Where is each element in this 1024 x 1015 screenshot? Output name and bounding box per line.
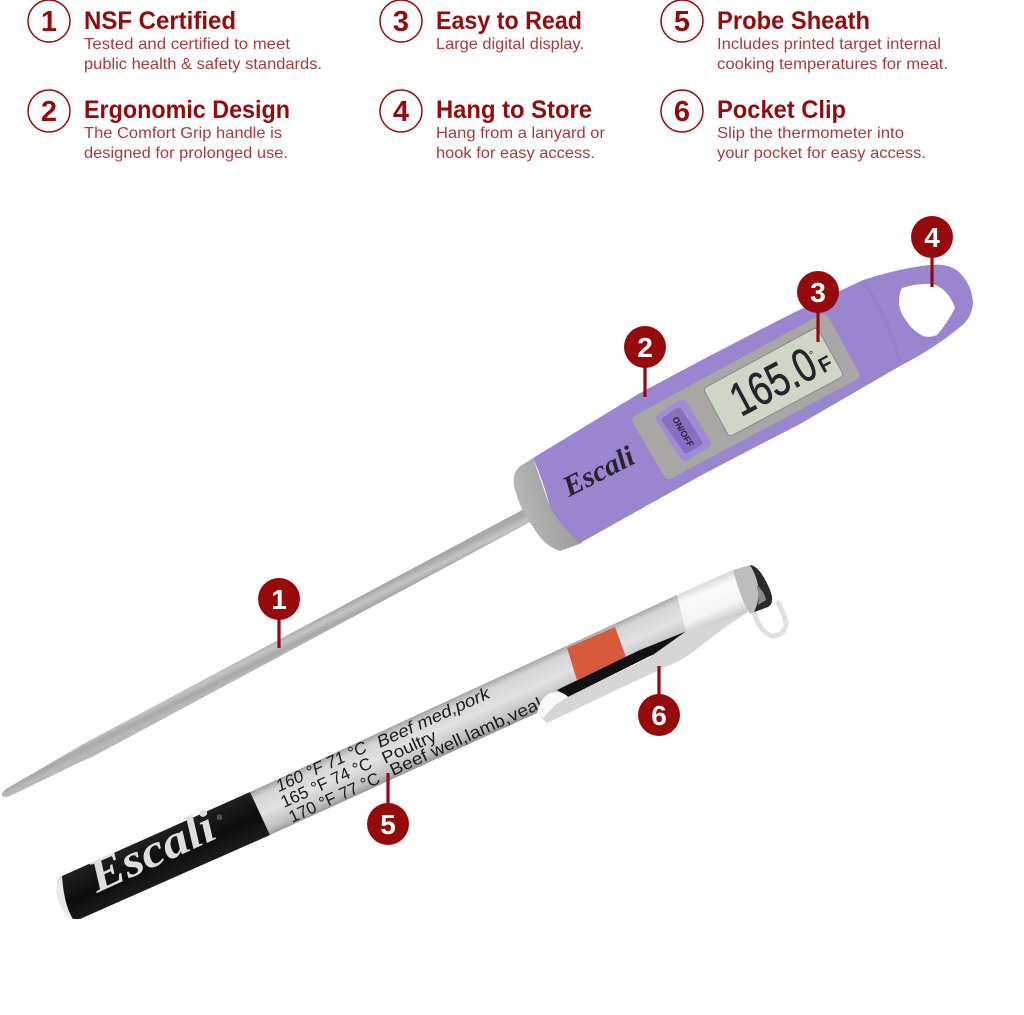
feature 5: Probe Sheath: Probe Sheath	[717, 7, 870, 35]
on/off label: ON/OFF	[670, 415, 696, 449]
feature 6: Pocket Clip: Pocket Clip	[717, 96, 846, 124]
callout 6: 6	[651, 700, 667, 731]
feature 4: Hang to Store	[380, 90, 606, 162]
temperature chart printed on sheath: 160 °F 71 °C	[273, 737, 370, 796]
LCD screen	[704, 328, 843, 436]
feature 2: Ergonomic Design: Ergonomic Design	[84, 96, 290, 124]
registered mark: ®	[217, 814, 223, 822]
feature 3: Easy to Read: Large digital display.	[436, 36, 584, 53]
sheath end highlight	[57, 876, 73, 919]
callout 1	[258, 578, 300, 648]
callout 2: 2	[637, 332, 653, 363]
feature 2: Ergonomic Design: designed for prolonged use.	[84, 145, 288, 162]
temperature chart printed on sheath	[273, 683, 545, 827]
cap opening	[750, 565, 772, 612]
temperature chart printed on sheath: Poultry	[379, 726, 440, 768]
feature 6: Pocket Clip: Slip the thermometer into	[717, 125, 904, 142]
feature 5: Probe Sheath: 5	[674, 6, 690, 38]
callout 4: 4	[924, 222, 940, 253]
feature 2: Ergonomic Design	[28, 90, 290, 162]
temperature chart printed on sheath: 170 °F 77 °C	[286, 769, 383, 827]
feature 5: Probe Sheath: Includes printed target internal	[717, 36, 941, 53]
sheath collar	[677, 570, 748, 633]
callout 5	[367, 773, 409, 845]
feature 6: Pocket Clip: 6	[674, 96, 690, 128]
callout 2	[624, 326, 666, 397]
faceplate	[632, 314, 860, 479]
LCD reading: 165.0	[721, 337, 825, 426]
clip tip highlight	[537, 692, 568, 718]
handle brand: Escali	[557, 440, 640, 504]
LCD reading: F	[815, 351, 837, 378]
purple handle with hanging loop	[533, 265, 973, 543]
orange target band	[567, 627, 626, 680]
feature 1: NSF Certified	[28, 0, 322, 73]
probe shaft	[2, 508, 532, 797]
callout 4	[911, 216, 953, 287]
feature 1: NSF Certified: NSF Certified	[84, 7, 236, 35]
pocket clip	[537, 612, 748, 723]
feature 1: NSF Certified: 1	[41, 6, 57, 38]
temperature chart printed on sheath: Beef well,lamb,veal	[387, 694, 545, 780]
sheath brand: Escali	[79, 800, 223, 903]
callout 3: 3	[810, 277, 826, 308]
dark clip gap	[557, 631, 687, 697]
end cap	[733, 565, 772, 614]
feature 5: Probe Sheath: cooking temperatures for meat.	[717, 56, 948, 73]
feature 6: Pocket Clip: your pocket for easy access.	[717, 145, 926, 162]
callout 5: 5	[380, 809, 396, 840]
grip crease	[863, 282, 900, 362]
callout 1: 1	[271, 584, 287, 615]
feature 1: NSF Certified: Tested and certified to meet	[84, 36, 291, 53]
feature 3: Easy to Read	[380, 0, 584, 53]
temperature chart printed on sheath: Beef med,pork	[374, 683, 494, 752]
feature 2: Ergonomic Design: The Comfort Grip handle is	[84, 125, 282, 142]
feature 6: Pocket Clip	[661, 90, 926, 162]
feature 3: Easy to Read: 3	[393, 6, 409, 38]
feature 4: Hang to Store: Hang to Store	[436, 96, 592, 124]
hanging ring	[754, 601, 786, 636]
handle collar	[514, 458, 582, 551]
on/off button inset	[662, 408, 702, 453]
thermometer illustration	[2, 265, 973, 797]
feature 4: Hang to Store: Hang from a lanyard or	[436, 125, 606, 142]
feature 4: Hang to Store: hook for easy access.	[436, 145, 595, 162]
feature 3: Easy to Read: Easy to Read	[436, 7, 582, 35]
feature 5: Probe Sheath	[661, 0, 948, 73]
cap reflection	[756, 585, 766, 605]
sheath silver tube	[250, 595, 690, 835]
callout 3	[797, 271, 839, 342]
temperature chart printed on sheath: 165 °F 74 °C	[278, 754, 375, 812]
sheath black end	[57, 792, 270, 919]
probe sheath illustration	[57, 565, 786, 919]
feature 1: NSF Certified: public health & safety standards.	[84, 56, 322, 73]
callout 6	[638, 666, 680, 736]
on/off button	[655, 400, 711, 461]
feature 4: Hang to Store: 4	[393, 96, 409, 128]
LCD reading: °	[808, 349, 817, 362]
feature 2: Ergonomic Design: 2	[41, 96, 57, 128]
